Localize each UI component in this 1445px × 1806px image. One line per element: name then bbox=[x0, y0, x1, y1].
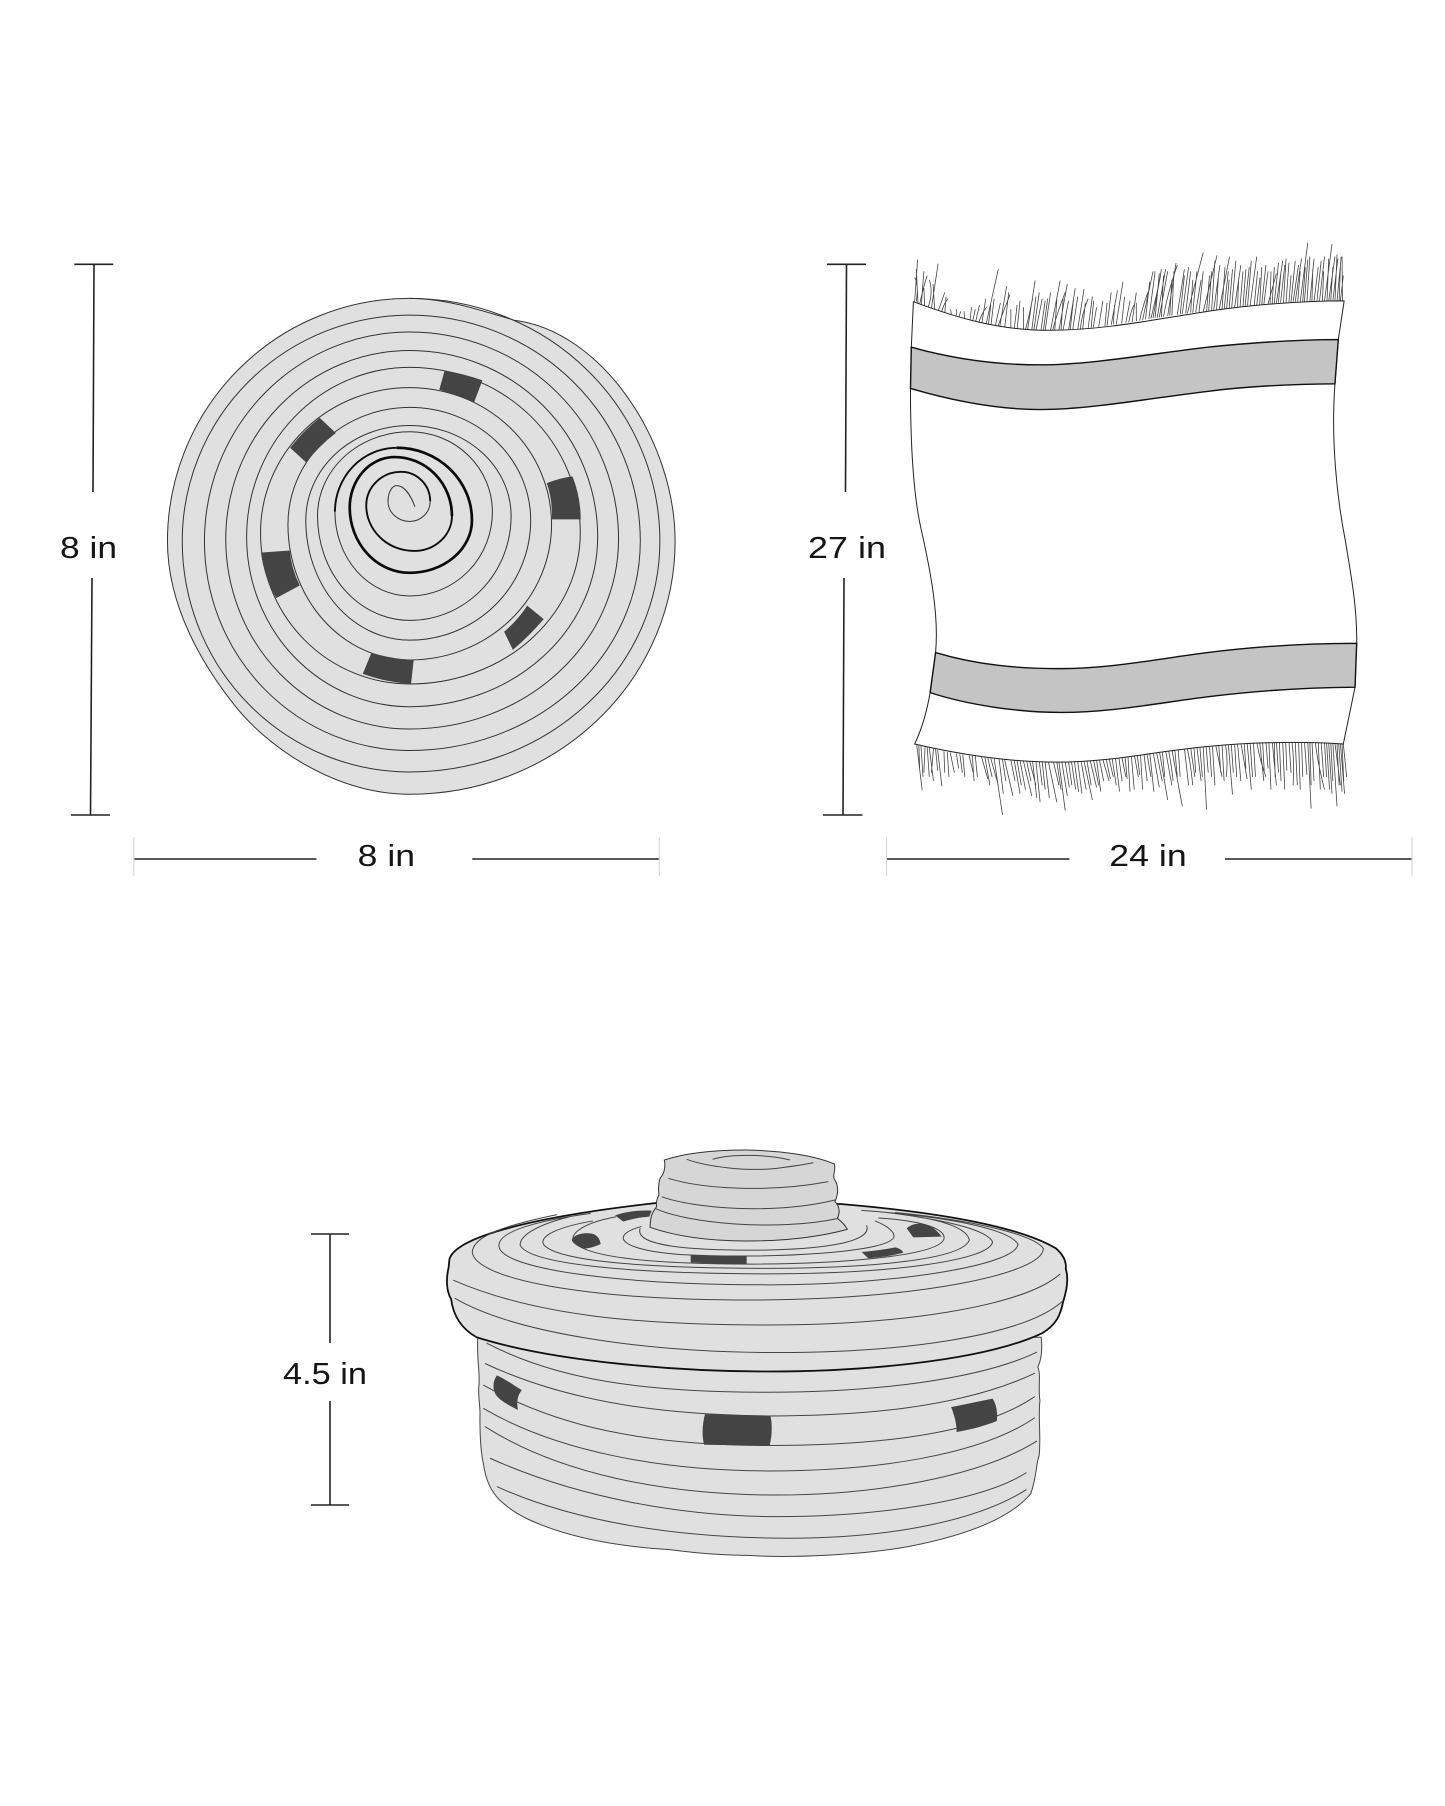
basket lid coil lines bbox=[453, 1210, 1062, 1353]
lidded basket illustration bbox=[447, 1150, 1067, 1556]
towel bottom stripe bbox=[930, 643, 1357, 712]
towel top stripe bbox=[910, 340, 1338, 410]
towel cloth bbox=[910, 301, 1357, 762]
label: basket height: 4.5 in bbox=[283, 1356, 367, 1391]
label: bowl height: 8 in bbox=[60, 530, 117, 565]
basket body and lid rings bbox=[447, 1203, 1067, 1556]
basket lid dark patches bbox=[572, 1211, 942, 1264]
label: towel height: 27 in bbox=[808, 530, 886, 565]
dimension: bowl height bbox=[60, 264, 117, 815]
dimension: towel height bbox=[808, 264, 886, 815]
bowl dark woven patches bbox=[261, 371, 581, 684]
dimension: towel width bbox=[886, 837, 1412, 876]
basket body coil lines bbox=[483, 1343, 1037, 1538]
bowl centre thick spiral bbox=[350, 448, 472, 573]
towel bottom fringe bbox=[917, 741, 1347, 815]
basket lid knob bbox=[650, 1150, 847, 1241]
bowl centre medium spiral bbox=[335, 448, 452, 551]
basket body dark patches bbox=[493, 1375, 997, 1446]
knob coil lines bbox=[655, 1155, 838, 1225]
basket knob and lid patches bbox=[572, 1150, 942, 1264]
bowl coil spiral bbox=[182, 298, 660, 772]
towel top fringe bbox=[915, 243, 1343, 330]
dimension: bowl width bbox=[134, 837, 659, 876]
label: bowl width: 8 in bbox=[358, 838, 415, 873]
dimension: basket height bbox=[283, 1234, 367, 1505]
basket lid bbox=[447, 1203, 1067, 1372]
bowl body bbox=[167, 298, 675, 794]
bowl illustration bbox=[167, 298, 675, 794]
label: towel width: 24 in bbox=[1109, 838, 1187, 873]
towel illustration bbox=[910, 243, 1357, 815]
basket body bbox=[478, 1337, 1042, 1556]
